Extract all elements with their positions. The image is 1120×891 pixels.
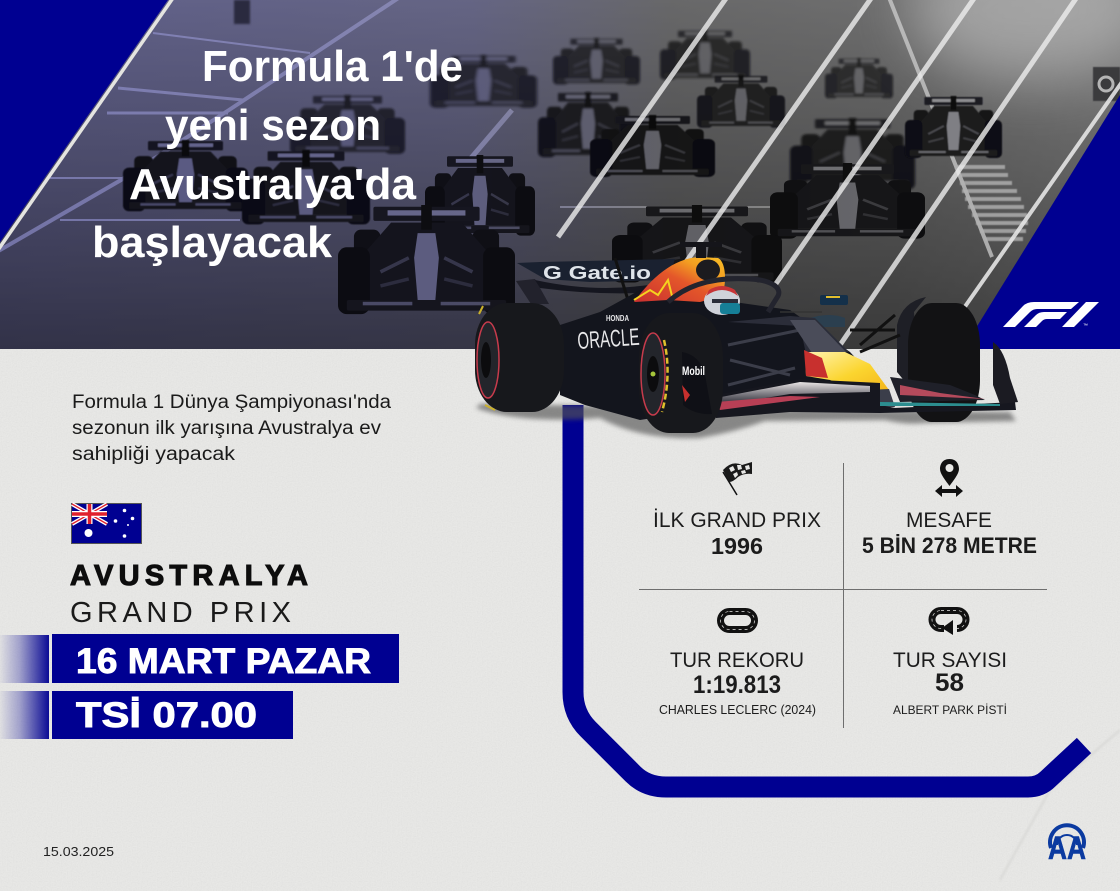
main body [560, 290, 890, 420]
front wing [715, 377, 1016, 418]
rear wing: G Gate.io [543, 263, 651, 283]
blue corner triangle top-left [0, 0, 173, 250]
time bar [0, 691, 293, 739]
sponsor lettering [577, 314, 640, 355]
stat: distance: MESAFE [906, 509, 992, 532]
intro text block: sezonun ilk yarışına Avustralya ev [72, 418, 382, 439]
far front wheel [897, 297, 980, 422]
title: Avustralya'da [129, 160, 417, 209]
stat: lap count: TUR SAYISI [893, 649, 1007, 672]
icon: Australian flag [72, 504, 142, 544]
background cars [123, 30, 925, 314]
icon: map pin with arrow [935, 459, 963, 497]
chassis top [728, 316, 849, 354]
rear wing [516, 258, 675, 304]
icon: checkered flag [723, 462, 752, 495]
bright upper-right track area [910, 0, 1120, 80]
header photo of race start [0, 0, 1120, 349]
icon: circuit [720, 612, 754, 630]
title [92, 42, 463, 267]
stats grid [639, 459, 1047, 728]
camera pod [680, 242, 722, 258]
halo [668, 279, 779, 312]
front wheel fairing: Mobil [682, 364, 705, 378]
purple tint [0, 0, 1120, 349]
front wing endplate [993, 342, 1018, 404]
kerb stripes and track line [888, 0, 1120, 257]
diagonal white stripes [556, 0, 1078, 346]
near front wheel [639, 313, 723, 433]
date bar: 16 MART PAZAR [76, 642, 371, 681]
race name heading [70, 560, 308, 629]
race name heading: AVUSTRALYA [70, 560, 308, 592]
intro text block [72, 392, 391, 465]
helmet [704, 286, 740, 315]
track markings [0, 0, 770, 253]
date bar [0, 634, 399, 683]
date stamp: 15.03.2025 [43, 844, 114, 859]
intro text block: sahipliği yapacak [72, 444, 236, 465]
mirror [780, 295, 848, 327]
stat: first grand prix: İLK GRAND PRIX [653, 509, 821, 532]
sponsor lettering: ORACLE [577, 324, 640, 355]
stat: first grand prix: 1996 [711, 533, 763, 559]
car shadow [476, 404, 1016, 438]
front wheel fairing [682, 352, 712, 414]
suspension bay [728, 315, 900, 385]
icon: F1 logo: ™ [1083, 323, 1088, 329]
intro text block: Formula 1 Dünya Şampiyonası'nda [72, 392, 391, 413]
nose [804, 350, 895, 407]
stat: lap record: TUR REKORU [670, 649, 804, 672]
icon: circuit with arrow [932, 610, 966, 636]
stat: lap record [659, 612, 816, 717]
stat: distance [862, 459, 1037, 558]
race car [475, 242, 1018, 438]
stat: lap record: 1:19.813 [693, 671, 781, 699]
title: Formula 1'de [202, 42, 463, 91]
rear wheel [475, 303, 564, 412]
stat: first grand prix [653, 462, 821, 559]
engine cover [634, 257, 725, 302]
stat: lap count: 58 [935, 669, 964, 697]
icon: F1 logo [1003, 302, 1099, 329]
time bar: TSİ 07.00 [76, 696, 257, 735]
blue corner triangle right with F1 logo [957, 82, 1120, 349]
sponsor lettering: HONDA [606, 314, 629, 323]
race name heading: GRAND PRIX [70, 597, 291, 629]
blue track line [573, 405, 1084, 787]
stat: lap count [893, 610, 1007, 717]
stat: distance: 5 BİN 278 METRE [862, 533, 1037, 558]
icon: AA logo: AA [1048, 830, 1086, 866]
grid dividers [639, 463, 1047, 728]
stat: lap record: CHARLES LECLERC (2024) [659, 703, 816, 717]
title: yeni sezon [165, 101, 381, 150]
stat: lap count: ALBERT PARK PİSTİ [893, 703, 1007, 717]
title: başlayacak [92, 218, 333, 267]
